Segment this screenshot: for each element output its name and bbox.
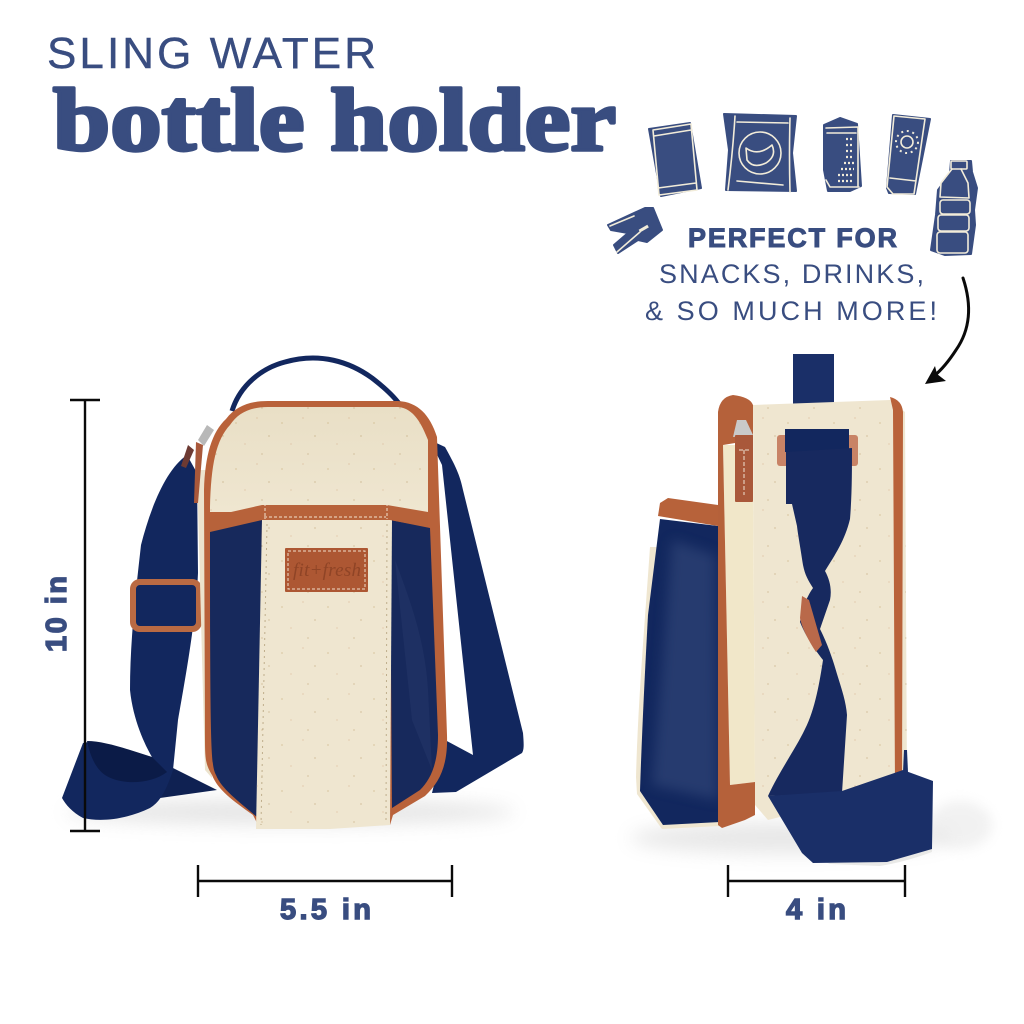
side view bag (630, 354, 992, 866)
fabric speckle center (256, 520, 392, 829)
trim stitching (264, 503, 387, 519)
shadow right (928, 801, 992, 849)
side pocket mesh (640, 519, 720, 825)
strap buckle inner (785, 429, 849, 452)
leather brand patch (285, 548, 368, 592)
center cream panel (256, 520, 392, 829)
leather brand patch: fit+fresh (293, 560, 361, 581)
arrow: to side view (925, 278, 969, 384)
fabric speckle side (753, 400, 907, 820)
left strap back piece (150, 768, 217, 798)
small buckle (800, 596, 822, 652)
depth label: 4 in (786, 894, 846, 926)
height label: 10 in (41, 576, 73, 652)
fabric speckle upper (210, 407, 428, 512)
strap edge behind bag (903, 750, 908, 772)
leather trim band (209, 505, 428, 532)
shadow: side bag (630, 822, 950, 854)
right mesh pocket (390, 520, 438, 808)
handle (232, 358, 402, 411)
shadow: front bag (65, 799, 515, 825)
width label: 5.5 in (280, 894, 371, 926)
title line: bottle holder: bottle holder (53, 72, 616, 170)
callout line 1: SNACKS, DRINKS, (659, 259, 924, 289)
bottom strap lining (815, 846, 932, 866)
panel stitching (261, 524, 387, 825)
main cream side (753, 400, 907, 820)
right piping (890, 397, 903, 788)
title line: sling water: SLING WATER (47, 29, 376, 78)
zipper pull tab (735, 435, 753, 502)
pocket leather band (658, 498, 718, 526)
twisted strap (768, 448, 852, 796)
icon: phone (649, 123, 701, 196)
icon: snack bag (724, 114, 796, 192)
callout text: perfect for (645, 223, 937, 326)
side pocket cream edge (636, 547, 720, 829)
callout heading: PERFECT FOR (688, 223, 897, 253)
left strap and loop (62, 455, 198, 820)
right strap (430, 440, 524, 793)
bottom strap (768, 770, 933, 863)
zipper pull (181, 425, 214, 503)
strap buckle (777, 435, 858, 466)
upper cream panel (210, 407, 428, 512)
icon: water bottle (931, 161, 977, 255)
mesh highlight (395, 560, 432, 770)
icon: sunscreen tube (887, 115, 930, 194)
left mesh pocket (210, 520, 262, 818)
mesh highlight (652, 540, 718, 800)
front view bag (62, 358, 524, 829)
icon: drink can (824, 118, 861, 191)
title (47, 29, 616, 170)
icon: keys (608, 208, 662, 253)
height dimension (41, 400, 100, 831)
callout line 2: & SO MUCH MORE! (645, 296, 937, 326)
width dimension (198, 865, 452, 926)
back edge cream (197, 470, 212, 778)
adjuster buckle (133, 582, 199, 629)
gusset cream strip (723, 445, 755, 785)
zipper slider (733, 420, 753, 437)
gusset leather piping (718, 395, 755, 828)
strap fold shading (87, 741, 167, 782)
top strap (793, 354, 834, 412)
depth dimension (728, 865, 905, 926)
bag body piping (204, 401, 447, 825)
